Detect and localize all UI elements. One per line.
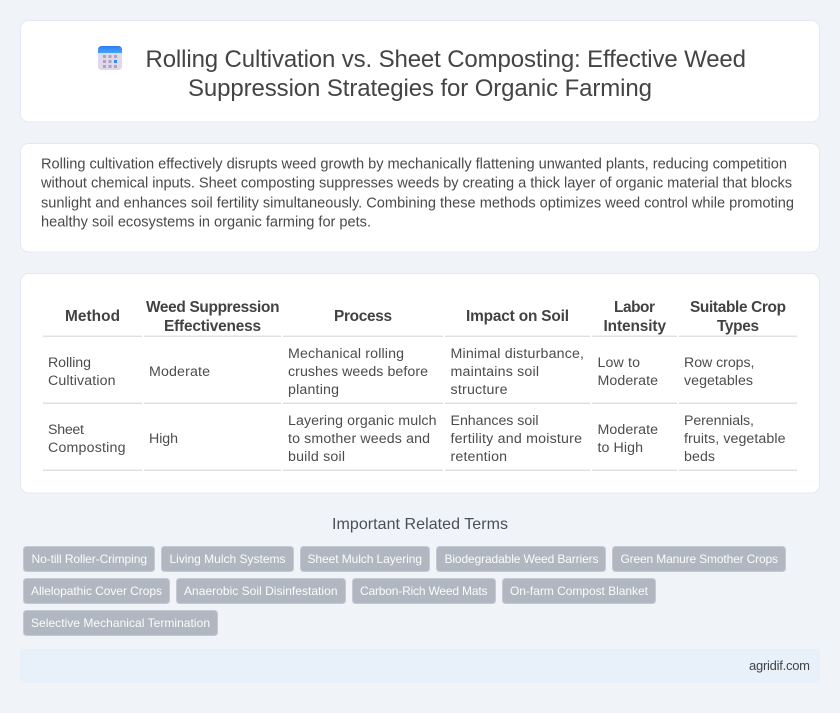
table header row: Types — [717, 318, 759, 335]
table header row: Suitable Crop — [690, 299, 786, 316]
title: Rolling Cultivation vs. Sheet Composting: Effective Weed — [146, 46, 746, 73]
table row: rolling cultivation — [43, 346, 797, 404]
table row: rolling cultivation: crushes weeds before — [288, 364, 428, 380]
footer — [20, 649, 820, 683]
table row: sheet composting: beds — [684, 449, 715, 465]
table row: sheet composting: Layering organic mulch — [288, 413, 436, 429]
panel: comparison table — [20, 274, 820, 493]
icon: calendar — [98, 46, 122, 70]
table row: rolling cultivation: vegetables — [684, 373, 753, 389]
related terms tags: Anaerobic Soil Disinfestation — [184, 584, 338, 598]
table row: sheet composting: build soil — [288, 449, 345, 465]
table row: rolling cultivation: Rolling — [48, 355, 91, 371]
table header row: Intensity — [604, 318, 666, 335]
table row: sheet composting: to High — [598, 440, 643, 456]
table row: rolling cultivation: maintains soil — [450, 364, 539, 380]
related terms tags: Biodegradable Weed Barriers — [444, 552, 598, 566]
table row: sheet composting: Composting — [48, 440, 126, 456]
related terms tags: Allelopathic Cover Crops — [31, 584, 162, 598]
text block: description: healthy soil ecosystems in organic farming for pets. — [41, 215, 371, 231]
table header row: Impact on Soil — [466, 308, 569, 325]
table header row: Process — [334, 308, 392, 325]
table row: rolling cultivation: planting — [288, 382, 339, 398]
related terms tags — [24, 546, 786, 636]
table row: sheet composting: Enhances soil — [450, 413, 538, 429]
text block: description — [40, 156, 794, 231]
related terms tags: Green Manure Smother Crops — [620, 552, 778, 566]
table row: rolling cultivation: Moderate — [149, 364, 210, 380]
table row: sheet composting — [43, 413, 797, 471]
text block: description: sunlight and enhances soil fertility simultaneously. Combining these methods optimizes weed control while promoting — [41, 196, 794, 212]
table header row: Weed Suppression — [146, 299, 280, 316]
related terms tags: Living Mulch Systems — [170, 552, 286, 566]
title — [146, 46, 746, 102]
text block: description: without chemical inputs. Sheet composting suppresses weeds by creating a thick layer of organic material that blocks — [40, 176, 792, 192]
table header row: Effectiveness — [164, 318, 261, 335]
table header row: Method — [65, 308, 120, 325]
table row: rolling cultivation: structure — [450, 382, 508, 398]
related terms tags: Sheet Mulch Layering — [308, 552, 422, 566]
table row: sheet composting: fruits, vegetable — [684, 431, 786, 447]
table header row — [43, 299, 797, 337]
table row: sheet composting: High — [149, 431, 178, 447]
table row: sheet composting: Moderate — [598, 422, 658, 438]
related terms tags: Selective Mechanical Termination — [31, 616, 210, 630]
table row: rolling cultivation: Cultivation — [48, 373, 116, 389]
related terms tags: No-till Roller-Crimping — [32, 552, 147, 566]
table row: rolling cultivation: Moderate — [598, 373, 658, 389]
panel: description — [20, 144, 820, 252]
text block: description: Rolling cultivation effectively disrupts weed growth by mechanically flattening unwanted plants, reducing competition — [41, 156, 787, 172]
panel: header — [20, 20, 820, 122]
footer text: site name: agridif.com — [749, 658, 810, 673]
table row: sheet composting: to smother weeds and — [288, 431, 430, 447]
table row: sheet composting: Perennials, — [684, 413, 754, 429]
title: Suppression Strategies for Organic Farming — [188, 75, 652, 102]
related terms tags: Carbon-Rich Weed Mats — [360, 584, 488, 598]
related terms tags: On-farm Compost Blanket — [510, 584, 649, 598]
table row: rolling cultivation: Minimal disturbance, — [450, 346, 584, 362]
table header row: Labor — [614, 299, 655, 316]
table row: rolling cultivation: Mechanical rolling — [288, 346, 404, 362]
heading: important related terms: Important Related Terms — [332, 516, 508, 533]
table row: sheet composting: retention — [450, 449, 507, 465]
table row: rolling cultivation: Low to — [598, 355, 640, 371]
table row: sheet composting: Sheet — [48, 422, 84, 438]
table row: sheet composting: fertility and moisture — [450, 431, 582, 447]
table row: rolling cultivation: Row crops, — [684, 355, 754, 371]
